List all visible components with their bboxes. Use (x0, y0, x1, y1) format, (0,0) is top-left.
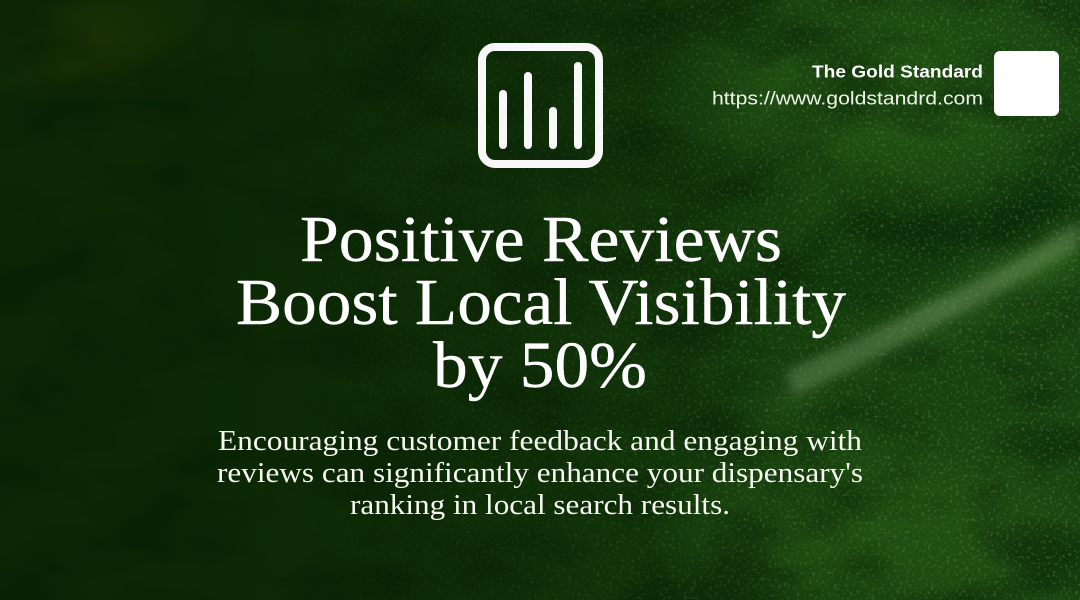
title (236, 203, 846, 402)
title: by 50% (433, 329, 647, 402)
brand name: The Gold Standard (812, 62, 983, 82)
brand text block (712, 62, 983, 108)
brand url: https://www.goldstandrd.com (712, 88, 983, 108)
title: Positive Reviews (300, 203, 782, 276)
icon: bar chart in rounded square (482, 47, 599, 164)
subtitle text block: reviews can significantly enhance your dispensary's (217, 458, 863, 489)
subtitle text block: ranking in local search results. (350, 490, 730, 521)
subtitle text block: Encouraging customer feedback and engaging with (218, 426, 862, 457)
logo placeholder (994, 51, 1059, 116)
title: Boost Local Visibility (236, 266, 846, 339)
subtitle text block (217, 426, 863, 521)
